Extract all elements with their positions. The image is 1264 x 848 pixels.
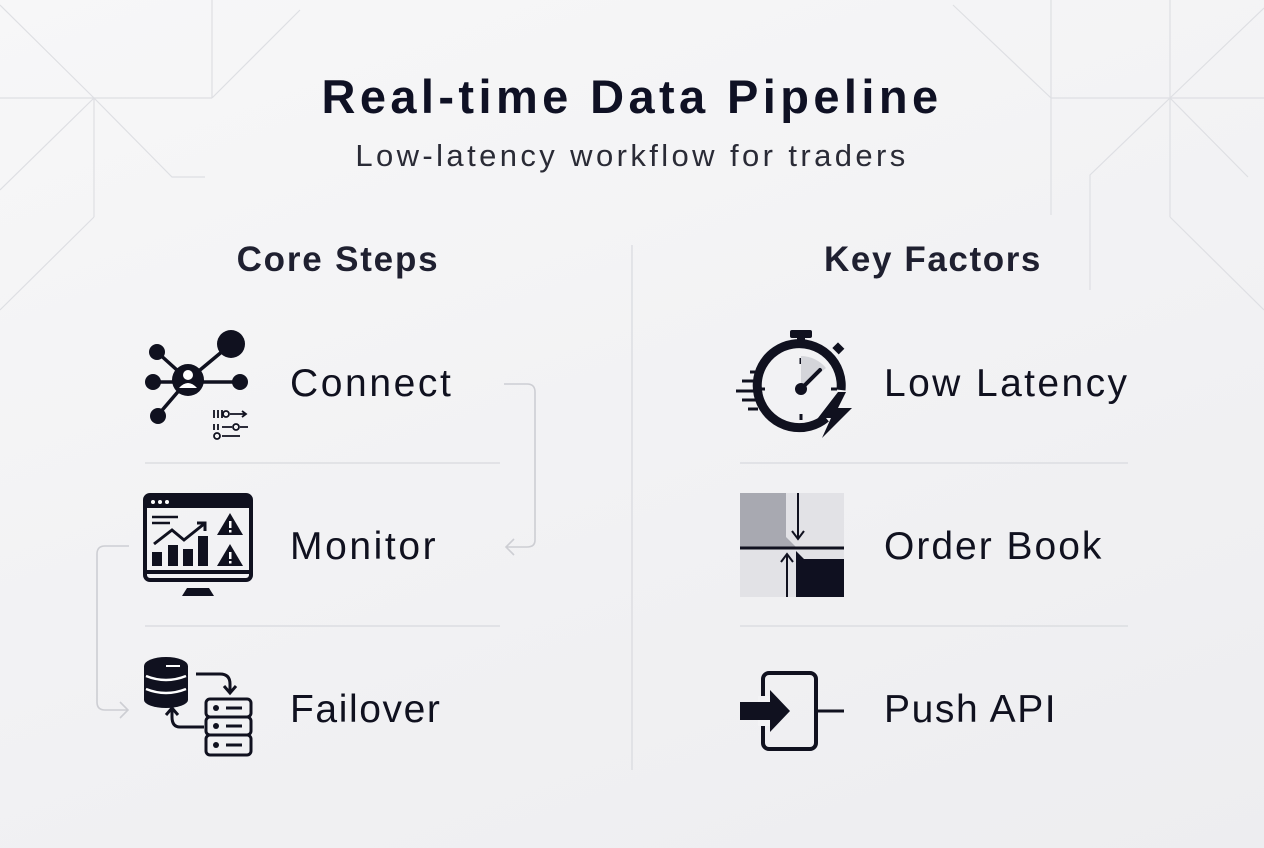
arrow: connect to monitor (504, 383, 536, 556)
heading: Key Factors: Key Factors (824, 240, 1042, 279)
icon: failover (144, 657, 252, 756)
step: Monitor: Monitor (290, 525, 438, 568)
step: Connect: Connect (290, 362, 453, 405)
icon: order book (740, 493, 844, 597)
factor: Low Latency: Low Latency (884, 362, 1129, 405)
heading: Core Steps: Core Steps (237, 240, 439, 279)
icon: monitor (143, 493, 253, 596)
subtitle: Low-latency workflow for traders (355, 138, 909, 173)
icon: connect network (145, 330, 248, 440)
factor: Order Book: Order Book (884, 525, 1103, 568)
factor: Push API: Push API (884, 688, 1057, 731)
title: Real-time Data Pipeline (322, 70, 942, 123)
icon: stopwatch (736, 330, 852, 438)
divider lines (145, 245, 1128, 770)
arrow: monitor to failover (96, 545, 129, 718)
step: Failover: Failover (290, 688, 442, 731)
icon: push api (740, 671, 844, 751)
